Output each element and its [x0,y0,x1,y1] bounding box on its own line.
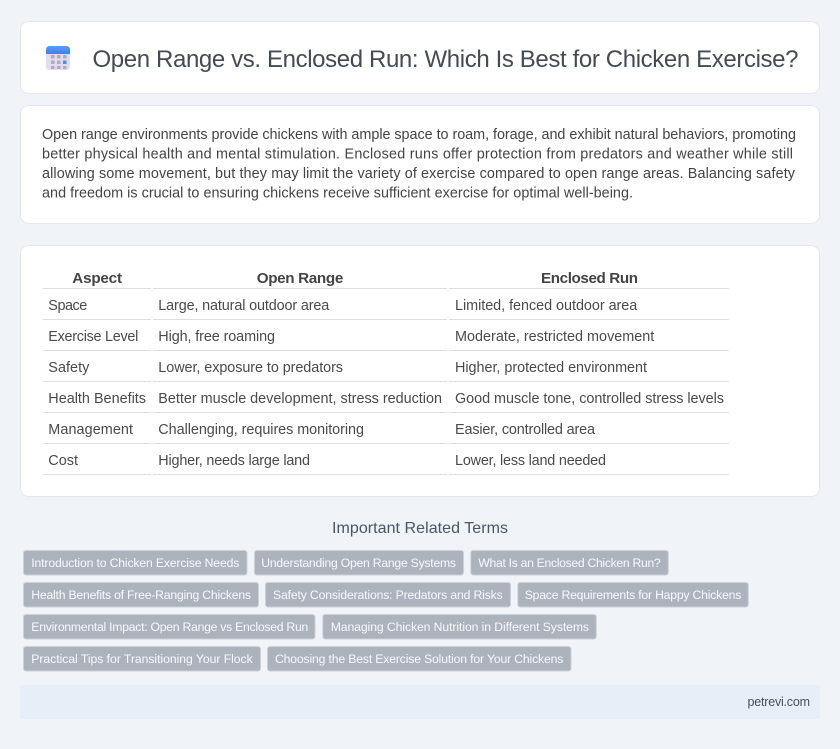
tag: What Is an Enclosed Chicken Run? [478,556,661,570]
tag [323,614,596,639]
row: exercise level: Moderate, restricted movement [455,329,654,345]
row: management: Easier, controlled area [455,422,595,438]
tag: Environmental Impact: Open Range vs Enclosed Run [31,620,308,634]
heading: important related terms: Important Related Terms [332,520,508,537]
tag [471,550,668,575]
intro paragraph: Open range environments provide chickens with ample space to roam, forage, and exhibit natural behaviors, promoting [42,127,796,143]
row: management: Challenging, requires monitoring [158,422,364,438]
row: space: Limited, fenced outdoor area [455,298,637,314]
row: safety: Higher, protected environment [455,360,647,376]
table header [43,270,729,288]
row: health benefits: Good muscle tone, controlled stress levels [455,391,724,407]
row: space: Space [48,298,87,314]
tag: Understanding Open Range Systems [261,556,456,570]
tag: Managing Chicken Nutrition in Different Systems [331,620,589,634]
title: Open Range vs. Enclosed Run: Which Is Best for Chicken Exercise? [92,46,798,73]
intro paragraph: better physical health and mental stimulation. Enclosed runs offer protection from predators and weather while still [42,146,793,162]
row: cost: Cost [48,453,78,469]
panel: introduction [20,106,820,224]
row: safety [43,360,729,382]
tag: Introduction to Chicken Exercise Needs [31,556,239,570]
row: safety: Safety [48,360,90,376]
row: management: Management [48,422,133,438]
tag [24,614,315,639]
row: safety: Lower, exposure to predators [158,360,343,376]
panel: comparison table [20,246,820,496]
tag [24,550,247,575]
tag: Safety Considerations: Predators and Risks [273,588,503,602]
row: space [43,298,729,320]
tag: Health Benefits of Free-Ranging Chickens [31,588,251,602]
table header: Open Range [257,270,343,287]
row: exercise level [43,329,729,350]
tag: Space Requirements for Happy Chickens [525,588,741,602]
tag [518,582,748,607]
tag: Choosing the Best Exercise Solution for Your Chickens [275,652,563,666]
row: space: Large, natural outdoor area [158,298,329,314]
icon: calendar [46,46,70,70]
row: management [43,422,729,444]
intro paragraph: and freedom is crucial to ensuring chickens receive sufficient exercise for optimal well-being. [42,186,633,202]
tag: Practical Tips for Transitioning Your Flock [31,652,254,666]
row: exercise level: High, free roaming [158,329,275,345]
row: exercise level: Exercise Level [48,329,138,345]
row: health benefits: Better muscle development, stress reduction [158,391,442,407]
intro paragraph: allowing some movement, but they may limit the variety of exercise compared to open range areas. Balancing safety [42,166,796,182]
row: health benefits [43,391,729,412]
row: health benefits: Health Benefits [48,391,146,407]
related terms tags [24,550,748,671]
intro paragraph [42,127,796,202]
table header: Aspect [72,270,122,287]
header panel [20,22,820,94]
footer source: petrevi.com [748,695,810,709]
row: cost: Lower, less land needed [455,453,606,469]
table header: Enclosed Run [541,270,638,287]
row: cost [43,453,729,474]
tag [24,646,260,671]
tag [266,582,510,607]
tag [254,550,464,575]
footer [20,685,820,719]
tag [268,646,571,671]
row: cost: Higher, needs large land [158,453,310,469]
tag [24,582,258,607]
